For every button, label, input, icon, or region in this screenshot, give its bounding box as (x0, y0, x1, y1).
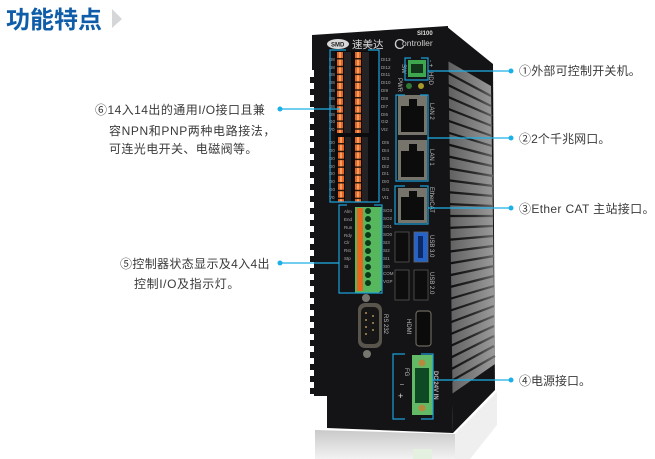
callout 6: general I/O: 可连光电开关、电磁阀等。 (109, 141, 258, 156)
brand logo: ontroller (402, 38, 433, 48)
callout 1: external power control: ①外部可控制开关机。 (519, 63, 641, 78)
status terminal block: SI3 (383, 240, 390, 245)
status terminal block: Run (344, 225, 353, 230)
EtherCAT port: EtherCAT (428, 187, 434, 213)
I/O labels: V0 (329, 195, 335, 200)
I/O labels: D0 (329, 164, 335, 169)
status terminal block (344, 207, 394, 293)
LAN 1 port: LAN 1 (428, 149, 434, 166)
reflection under device (315, 392, 497, 459)
HDD switch connector (396, 60, 433, 93)
I/O labels: D8 (329, 104, 335, 109)
I/O labels (329, 57, 391, 200)
callout 3: EtherCAT master (428, 201, 655, 216)
USB 2.0 ports: USB 2.0 (428, 272, 434, 295)
LAN 1 port (398, 140, 434, 180)
USB 3.0 ports: USB 3.0 (428, 235, 434, 258)
title: 功能特点 (6, 7, 102, 34)
I/O labels: VI2 (381, 127, 388, 132)
DC power connector: FG (403, 368, 409, 377)
I/O labels: GI2 (381, 119, 389, 124)
status terminal block: VGP (383, 279, 393, 284)
status terminal block: SO3 (383, 208, 393, 213)
I/O labels: DI9 (381, 88, 388, 93)
callout 6: general I/O: ⑥14入14出的通用I/O接口且兼 (95, 102, 265, 117)
status terminal block: End (344, 217, 353, 222)
I/O labels: DI13 (381, 57, 391, 62)
status terminal block: Alm (344, 209, 352, 214)
I/O labels: DI8 (381, 96, 388, 101)
I/O labels: D8 (329, 65, 335, 70)
left comb teeth (310, 77, 315, 394)
I/O labels: D0 (329, 156, 335, 161)
I/O labels: D8 (329, 57, 335, 62)
I/O labels: V0 (329, 127, 335, 132)
I/O labels: DI6 (381, 112, 388, 117)
highlight brackets (330, 50, 433, 419)
DC power connector: – (400, 381, 404, 388)
callout 5: status display: 控制I/O及指示灯。 (134, 276, 240, 291)
callout 2: gigabit ports (428, 132, 610, 146)
brand logo: SI100 (417, 31, 433, 37)
LAN 2 port (398, 95, 434, 135)
HDD switch connector: SW (400, 64, 406, 74)
brand logo (327, 31, 433, 53)
I/O labels: D0 (329, 148, 335, 153)
DC power connector: + (398, 391, 403, 401)
HDD switch connector: PWR (396, 78, 402, 93)
status terminal block: COM (383, 271, 394, 276)
I/O labels: DI7 (381, 104, 388, 109)
reflection of connector (413, 449, 432, 459)
brand logo: SMD (331, 42, 345, 48)
I/O labels: D8 (329, 88, 335, 93)
I/O labels: DI1 (382, 171, 390, 176)
I/O labels: D0 (329, 171, 335, 176)
I/O labels: D8 (329, 96, 335, 101)
status terminal block: SO2 (383, 216, 393, 221)
RS232 connector (358, 294, 388, 358)
device: controller (310, 26, 495, 433)
I/O labels: G0 (329, 187, 336, 192)
callout 6: general I/O: 容NPN和PNP两种电路接法， (109, 123, 276, 138)
status terminal block: SO1 (383, 224, 393, 229)
I/O labels: DI11 (381, 72, 391, 77)
brand logo: C (394, 36, 405, 53)
I/O labels: DI4 (382, 148, 390, 153)
USB 2.0 ports (395, 270, 434, 300)
DC power connector (398, 355, 438, 415)
brand logo: 速美达 (352, 38, 384, 51)
heatsink side (446, 26, 495, 433)
callout 3: EtherCAT master: ③Ether CAT 主站接口。 (519, 201, 655, 216)
callout 6: general I/O (95, 102, 340, 156)
I/O terminals (335, 51, 378, 202)
status terminal block: SI1 (383, 256, 390, 261)
status terminal block: SO0 (383, 232, 393, 237)
I/O labels: G0 (329, 119, 336, 124)
DC power connector: DC 24V IN (432, 371, 438, 400)
RS232 connector: RS 232 (382, 314, 388, 335)
EtherCAT port (398, 187, 434, 223)
I/O labels: DI5 (382, 140, 390, 145)
HDMI port (405, 311, 431, 346)
callout 4: power port (433, 373, 591, 388)
status terminal block: Rdy (344, 233, 353, 238)
HDD switch connector: - + (427, 60, 433, 68)
I/O labels: DI0 (382, 179, 390, 184)
icon: title arrow (112, 9, 122, 28)
I/O labels: D0 (329, 140, 335, 145)
callout 5: status display: ⑤控制器状态显示及4入4出 (120, 257, 270, 271)
status terminal block: SI2 (383, 248, 390, 253)
I/O labels: D8 (329, 112, 335, 117)
front panel (312, 26, 453, 433)
status terminal block: Stp (344, 256, 351, 261)
status terminal block: Rst (344, 248, 351, 253)
callout 5: status display (120, 257, 339, 291)
USB 3.0 ports (395, 232, 434, 262)
HDMI port: HDMI (405, 319, 411, 335)
I/O labels: D8 (329, 72, 335, 77)
I/O labels: D8 (329, 80, 335, 85)
status terminal block: SI0 (383, 264, 390, 269)
LAN 2 port: LAN 2 (428, 103, 434, 120)
I/O labels: DI3 (382, 156, 390, 161)
callout 2: gigabit ports: ②2个千兆网口。 (519, 132, 610, 146)
callout 4: power port: ④电源接口。 (519, 373, 591, 388)
status terminal block: Clr (344, 240, 350, 245)
I/O labels: DI12 (381, 65, 391, 70)
I/O labels: DI2 (382, 164, 390, 169)
I/O labels: VI1 (382, 195, 389, 200)
I/O labels: DI10 (381, 80, 391, 85)
HDD switch connector: HDD (427, 72, 433, 86)
I/O labels: GI1 (382, 187, 390, 192)
I/O labels: D0 (329, 179, 335, 184)
callout 1: external power control (428, 63, 641, 78)
status terminal block: St (344, 264, 349, 269)
